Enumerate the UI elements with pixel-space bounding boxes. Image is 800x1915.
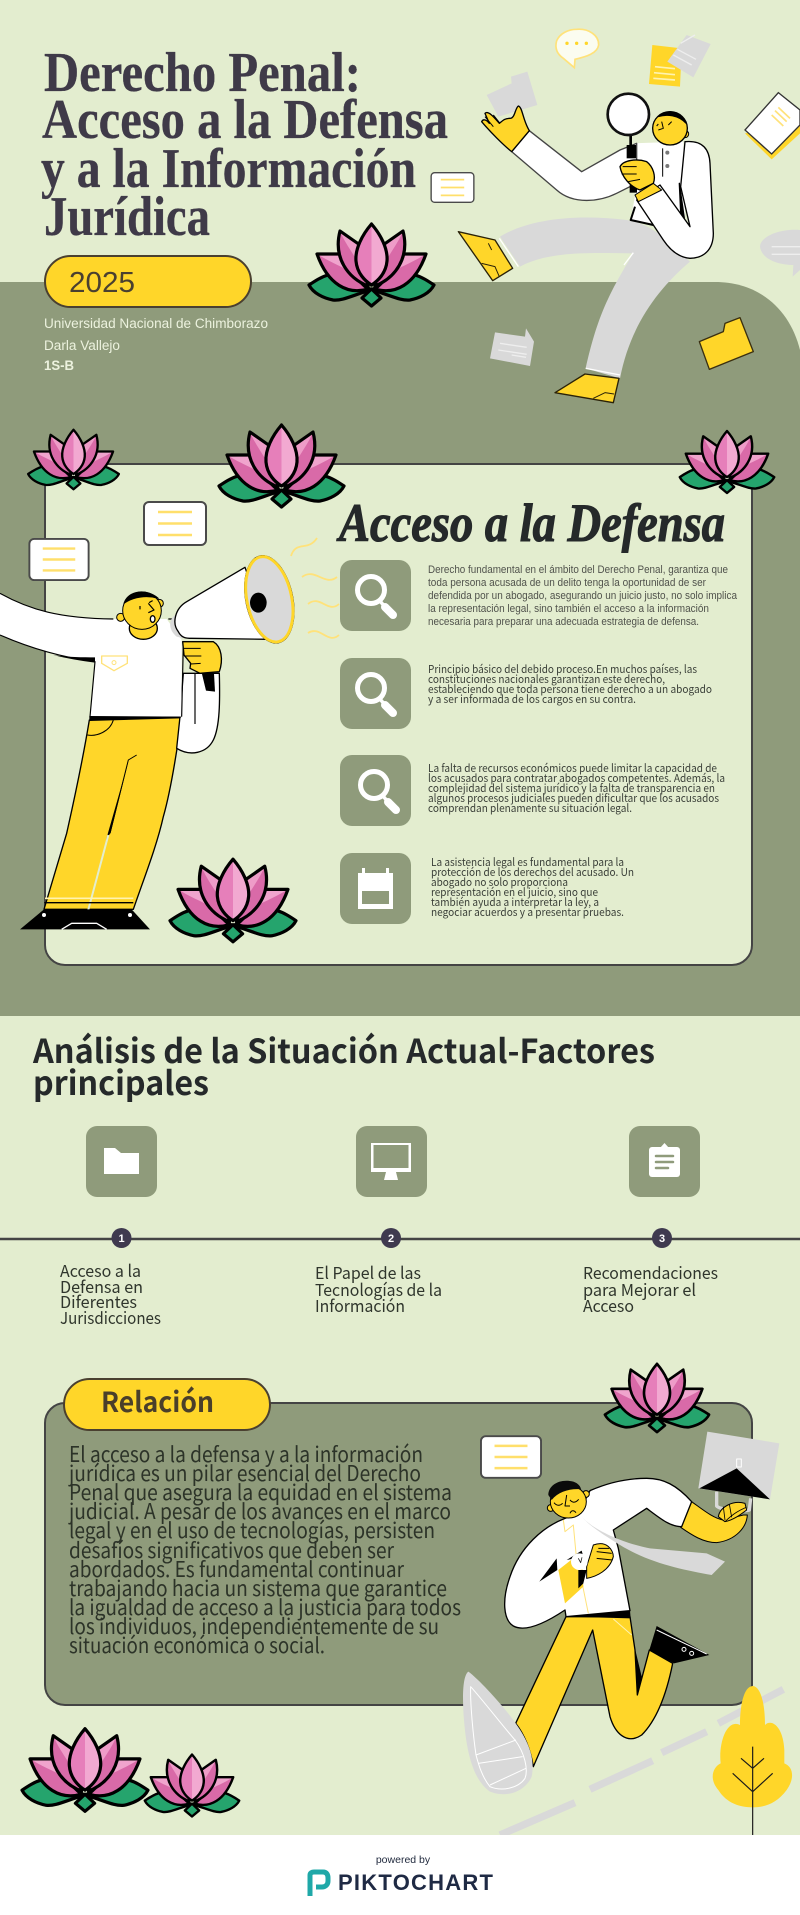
text block: factor 3 (583, 1260, 718, 1317)
text block: point 1: toda persona acusada de un delito tenga la oportunidad de ser (428, 577, 706, 589)
note card: relacion (481, 1436, 541, 1478)
text block: point 3: La falta de recursos económicos puede limitar la capacidad de (428, 760, 717, 776)
icon: monitor (356, 1126, 427, 1197)
illustration: man with magnifying glass (458, 94, 713, 403)
year pill: 2025 (69, 267, 135, 299)
text block: factor 2: Tecnologías de la (315, 1277, 442, 1301)
text block: factor 3: para Mejorar el (583, 1277, 696, 1301)
text block: point 3: comprendan plenamente su situación legal. (428, 800, 632, 816)
text block: point 1: defendida por un abogado, asegurando un juicio justo, no solo implica (428, 590, 738, 602)
lotus: panel top left (28, 430, 119, 489)
text block: point 2: Principio básico del debido proceso.En muchos países, las (428, 661, 697, 677)
text block: point 4: La asistencia legal es fundamental para la (431, 854, 624, 870)
text block: relacion paragraph: Penal que asegura la equidad en el sistema (69, 1476, 452, 1507)
lotus: panel bottom (170, 859, 296, 942)
timeline marker 3 (652, 1228, 672, 1248)
heading: analisis (32, 1025, 655, 1105)
text block: point 1: necesaria para preparar una adecuada estrategia de defensa. (428, 616, 699, 628)
road dashes (500, 1689, 783, 1835)
text block: point 3: algunos procesos judiciales pueden dificultar que los acusados (428, 790, 719, 806)
text block: factor 1 (60, 1258, 161, 1329)
lotus: bottom left large (22, 1729, 148, 1811)
text block: point 3: los acusados para contratar abogados competentes. Además, la (428, 770, 725, 786)
text block: relacion paragraph: El acceso a la defensa y a la información (69, 1438, 423, 1469)
text block: factor 2: Información (315, 1293, 405, 1317)
illustration: floating documents (487, 29, 800, 369)
timeline marker 1 (112, 1228, 132, 1248)
powered by: powered by (376, 1854, 431, 1866)
text block: point 2: estableciendo que toda persona tiene derecho a un abogado (428, 681, 712, 697)
text block: point 2 (428, 661, 712, 707)
text block: relacion paragraph: jurídica es un pilar esencial del Derecho (68, 1457, 421, 1488)
timeline line (0, 1238, 800, 1240)
note card: panel 1 (144, 502, 206, 545)
text block: relacion paragraph: judicial. A pesar de los avances en el marco (68, 1495, 451, 1526)
text block: factor 2 (315, 1260, 442, 1317)
title: y a la Información (41, 138, 416, 200)
icon: search 3 (340, 755, 411, 826)
text block: relacion paragraph: legal y en el uso de tecnologías, persisten (69, 1514, 435, 1545)
illustration: running man (463, 1432, 779, 1794)
text block: factor 1: Diferentes (60, 1289, 137, 1313)
text block: factor 1: Jurisdicciones (60, 1305, 161, 1329)
author info: 1S-B (44, 358, 74, 373)
panel: acceso a la defensa (45, 464, 752, 965)
timeline marker 2 (381, 1228, 401, 1248)
text block: factor 3: Acceso (583, 1293, 634, 1317)
lotus: header (309, 224, 434, 306)
sound waves (291, 538, 339, 638)
text block: point 3: complejidad del sistema jurídico y la falta de transparencia en (428, 780, 715, 796)
title: Acceso a la Defensa (42, 89, 448, 151)
note card: panel 2 (29, 539, 89, 580)
timeline marker 1: 1 (118, 1233, 125, 1245)
icon: calendar (340, 853, 411, 924)
author info (44, 316, 268, 373)
author info: Darla Vallejo (44, 338, 120, 353)
text block: point 3 (428, 760, 725, 816)
heading pill: relacion: Relación (101, 1381, 214, 1421)
icon: folder (86, 1126, 157, 1197)
text block: relacion paragraph: los individuos, independientemente de su (69, 1610, 439, 1641)
year pill (45, 256, 251, 307)
text block: factor 3: Recomendaciones (583, 1260, 718, 1284)
timeline marker 3: 3 (659, 1233, 665, 1245)
illustration: man with megaphone (0, 550, 302, 929)
title (41, 42, 448, 248)
text block: point 4: negociar acuerdos y a presentar pruebas. (431, 904, 624, 920)
heading pill: relacion (64, 1379, 270, 1430)
author info: Universidad Nacional de Chimborazo (44, 316, 268, 331)
text block: point 4: también ayuda a interpretar la ley, a (431, 894, 599, 910)
icon: search 1 (340, 560, 411, 631)
text block: relacion paragraph: abordados. Es fundamental continuar (69, 1553, 405, 1584)
title: Derecho Penal: (44, 42, 361, 104)
text block: point 4: protección de los derechos del acusado. Un (431, 864, 634, 880)
heading: acceso a la defensa: Acceso a la Defensa (336, 493, 725, 553)
footer (0, 1835, 800, 1915)
timeline marker 2: 2 (388, 1233, 394, 1245)
lotus: relacion top right (605, 1364, 709, 1432)
text block: relacion paragraph: desafíos significativos que deben ser (69, 1534, 395, 1565)
text block: point 1: Derecho fundamental en el ámbito del Derecho Penal, garantiza que (428, 564, 728, 576)
olive band background (0, 282, 800, 1016)
text block: point 2: y a ser informada de los cargos en su contra. (428, 691, 636, 707)
text block: point 4: representación en el juicio, sino que (431, 884, 598, 900)
icon: clipboard (629, 1126, 700, 1197)
logo wordmark: PIKTOCHART (338, 1870, 494, 1895)
logo icon (310, 1872, 328, 1896)
text block: point 2: constituciones nacionales garantizan este derecho, (428, 671, 665, 687)
lotus: panel top center (219, 425, 344, 507)
text block: factor 1: Defensa en (60, 1274, 143, 1298)
heading: analisis: Análisis de la Situación Actual-Factores (32, 1025, 655, 1073)
note card: header (431, 173, 474, 202)
text block: factor 2: El Papel de las (315, 1260, 421, 1284)
heading: analisis: principales (33, 1057, 209, 1105)
text block: point 1 (428, 564, 738, 628)
text block: factor 1: Acceso a la (60, 1258, 141, 1282)
text block: relacion paragraph: la igualdad de acceso a la justicia para todos (69, 1591, 461, 1622)
text block: point 1: la representación legal, sino también el acceso a la información (428, 603, 709, 615)
text block: relacion paragraph: trabajando hacia un sistema que garantice (69, 1572, 447, 1603)
text block: point 4 (431, 854, 634, 920)
lotus: panel top right (680, 431, 774, 493)
title: Jurídica (44, 186, 210, 248)
text block: relacion paragraph (68, 1438, 461, 1660)
lotus: bottom left small (145, 1755, 239, 1816)
text block: relacion paragraph: situación económica o social. (69, 1629, 325, 1660)
panel: relacion (45, 1403, 752, 1705)
text block: point 4: abogado no solo proporciona (431, 874, 568, 890)
illustration: yellow tree (713, 1686, 792, 1835)
icon: search 2 (340, 658, 411, 729)
